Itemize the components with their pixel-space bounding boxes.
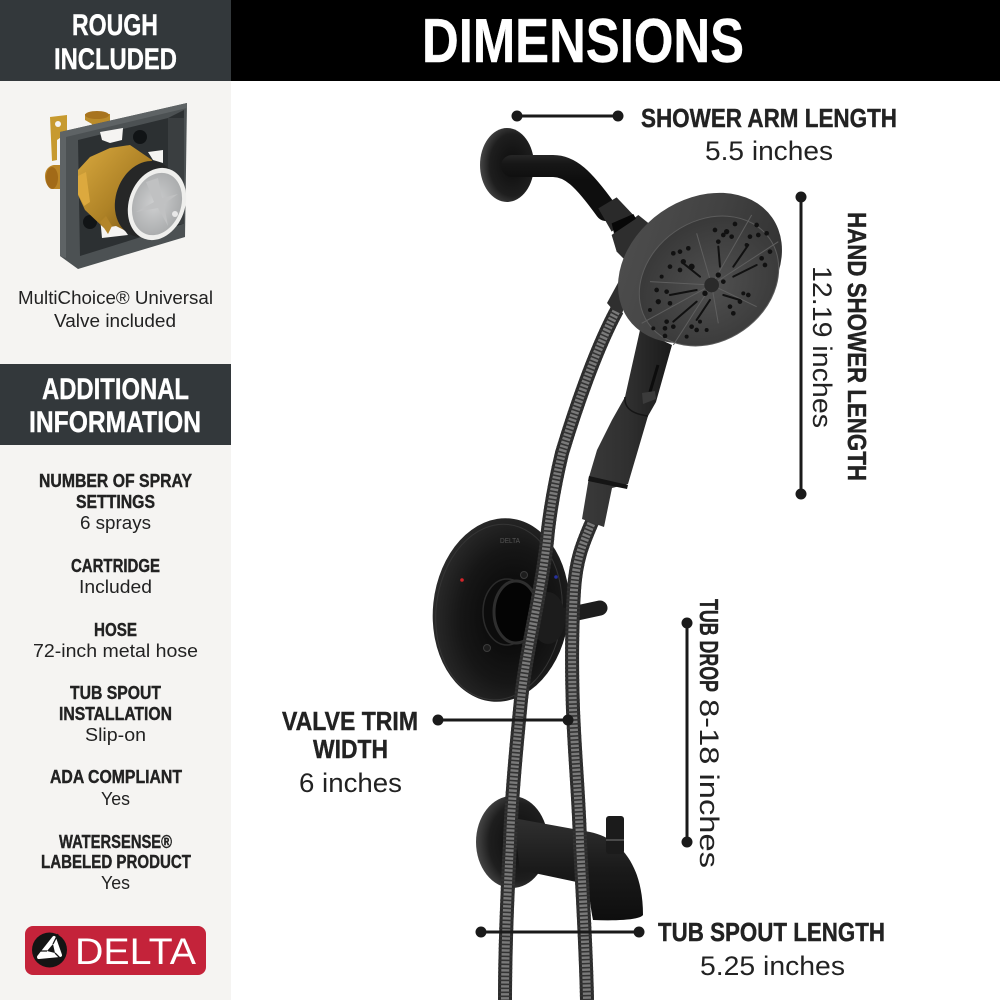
dimension: valve trim width: WIDTH <box>313 734 388 764</box>
dimension: valve trim width: VALVE TRIM <box>282 706 418 736</box>
valve handle lever <box>540 608 600 621</box>
heading: rough included <box>54 9 177 76</box>
product: shower arm and flange <box>480 128 655 263</box>
text: number of spray settings: NUMBER OF SPRAY <box>39 471 192 491</box>
icon: delta logo <box>25 926 206 975</box>
text: number of spray settings: 6 sprays <box>80 512 151 533</box>
text: tub spout installation: Slip-on <box>85 724 146 745</box>
dimension: tub spout length <box>476 917 885 981</box>
dimension: tub drop: 8-18 inches <box>694 699 724 868</box>
text: watersense labeled product <box>41 832 191 893</box>
product: tub spout <box>476 796 643 920</box>
panel: dimensions header bar <box>231 0 1000 81</box>
text: hose: HOSE <box>94 620 137 640</box>
product: hand shower head <box>282 103 897 981</box>
dimension: shower arm length <box>512 103 897 166</box>
product: hose connector <box>607 270 633 314</box>
panel: rough included header <box>0 0 231 81</box>
frame openings <box>100 128 123 143</box>
dimension: hand shower length: HAND SHOWER LENGTH <box>842 212 872 481</box>
bezel <box>104 152 188 246</box>
text: tub spout installation <box>59 683 172 745</box>
text: valve caption: Valve included <box>54 310 176 331</box>
dimension: tub spout length: 5.25 inches <box>700 951 845 981</box>
frame <box>60 103 187 269</box>
dimension: tub drop: TUB DROP <box>694 599 724 692</box>
heading: rough included: ROUGH <box>72 9 158 42</box>
nut details <box>133 130 147 144</box>
marker line <box>432 714 574 726</box>
brass body <box>78 145 152 236</box>
text: hose <box>33 620 198 661</box>
heading: additional information: ADDITIONAL <box>42 373 189 406</box>
nozzles and spokes <box>642 215 778 345</box>
brass fittings behind frame <box>50 115 67 161</box>
dimension: tub spout length: TUB SPOUT LENGTH <box>658 917 885 947</box>
text: watersense labeled product: LABELED PRODUCT <box>41 852 191 872</box>
heading: rough included: INCLUDED <box>54 43 177 76</box>
icon: rough-in valve photo <box>45 103 196 269</box>
text: watersense labeled product: WATERSENSE® <box>59 832 172 852</box>
text: ada compliant <box>50 767 182 809</box>
dimension: valve trim width: 6 inches <box>299 768 402 798</box>
title: dimensions: DIMENSIONS <box>422 7 744 76</box>
marker line <box>682 618 692 848</box>
text: number of spray settings <box>39 471 192 533</box>
text: cartridge: CARTRIDGE <box>71 556 160 576</box>
marker line <box>476 926 644 938</box>
text: cartridge: Included <box>79 576 152 597</box>
text: number of spray settings: SETTINGS <box>76 492 155 512</box>
text: hose: 72-inch metal hose <box>33 640 198 661</box>
heading: additional information: INFORMATION <box>29 406 201 439</box>
product: right hose <box>572 522 592 1000</box>
product: valve trim plate and handle <box>424 511 600 709</box>
text: tub spout installation: TUB SPOUT <box>70 683 161 703</box>
marker line <box>796 192 806 500</box>
dimension: valve trim width <box>282 706 574 798</box>
trim markings: DELTA <box>500 536 520 545</box>
heading: additional information <box>29 373 201 439</box>
text: ada compliant: ADA COMPLIANT <box>50 767 182 787</box>
text: tub spout installation: INSTALLATION <box>59 704 172 724</box>
text: valve caption: MultiChoice® Universal <box>18 287 213 308</box>
dimension: shower arm length: SHOWER ARM LENGTH <box>641 103 897 133</box>
panel: additional information header <box>0 364 231 445</box>
dimension: hand shower length: 12.19 inches <box>807 266 837 428</box>
product: hand shower handle <box>582 330 672 527</box>
dimension: shower arm length: 5.5 inches <box>705 136 833 166</box>
dimension: tub drop <box>682 599 724 868</box>
marker line <box>512 110 624 122</box>
text: cartridge <box>71 556 160 597</box>
icon: delta logo: DELTA <box>75 931 196 972</box>
text: watersense labeled product: Yes <box>101 872 130 893</box>
dimension: hand shower length <box>796 192 872 500</box>
left sidebar background <box>0 0 231 1000</box>
text: valve caption <box>18 287 213 331</box>
product: left hose <box>505 310 617 1000</box>
text: ada compliant: Yes <box>101 788 130 809</box>
